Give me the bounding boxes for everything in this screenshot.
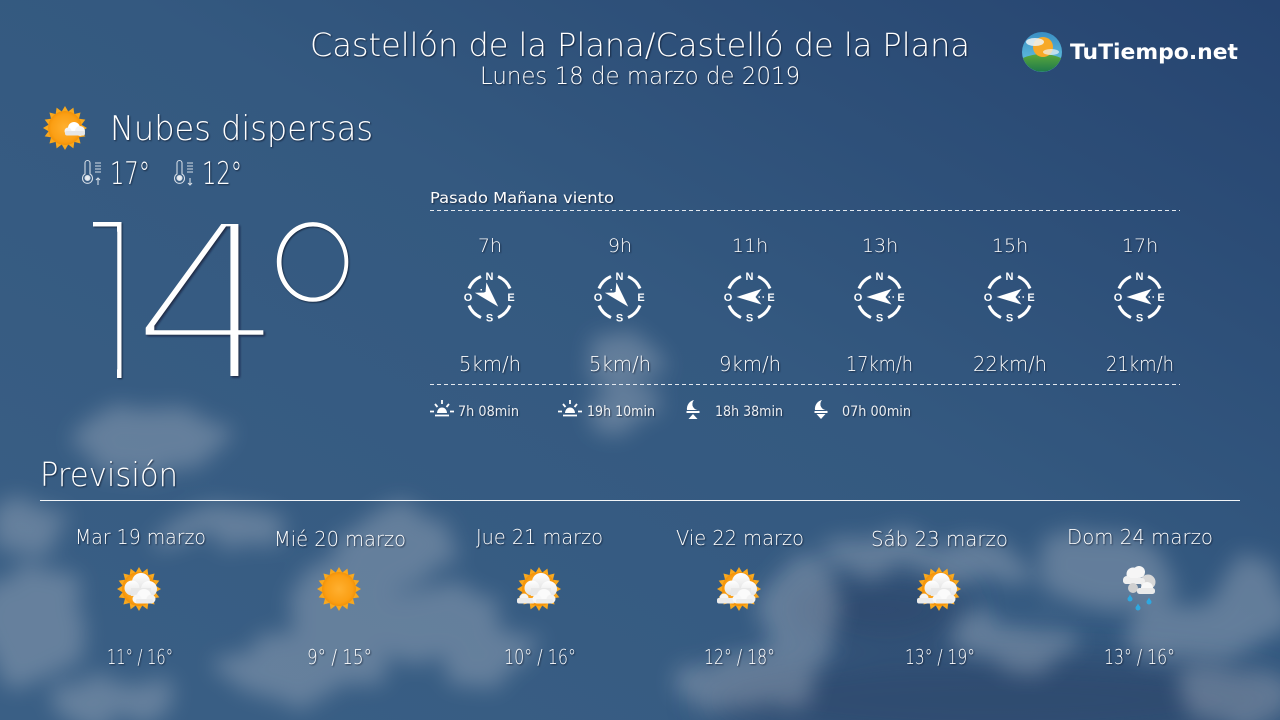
wind speeds: 21km/h [1106,352,1174,376]
forecast day 1: Mar 19 marzo [75,525,206,549]
icon: moonrise [686,400,700,419]
sunrise time: 7h 08min [458,404,519,420]
icon: logo globe [1022,32,1062,72]
logo wordmark: TuTiempo.net [1070,40,1238,64]
wind speeds: 5km/h [459,352,521,376]
forecast day 2: 9° / 15° [307,645,372,669]
icon: sunset [558,400,582,416]
icon: compass 9h: E [637,292,645,304]
current temperature: 4 [132,179,284,429]
forecast day 3: 10° / 16° [504,645,576,669]
wind hours: 7h [478,235,502,257]
icon: compass 17h: E [1157,292,1165,304]
wind hours: 9h [608,235,632,257]
forecast day 6: Dom 24 marzo [1067,525,1213,549]
min temperature: 12° [202,156,242,192]
wind speeds [459,352,1174,376]
title: Castellón de la Plana/Castelló de la Plana [310,26,970,64]
title [310,26,970,90]
moonset time: 07h 00min [842,404,911,420]
icon: compass 9h: N [616,271,624,283]
logo [1022,32,1238,72]
date subtitle: Lunes 18 de marzo de 2019 [480,62,800,90]
wind speeds: 9km/h [719,352,781,376]
forecast day 3 [476,525,603,669]
icon: compass 17h [1114,271,1165,325]
icon: compass 7h: E [507,292,515,304]
icon: thermometer min [174,160,193,185]
forecast day 2: Mié 20 marzo [274,527,406,551]
wind hours: 13h [862,235,898,257]
forecast day 1 [75,525,206,669]
icon: compass 11h: S [746,313,753,325]
icon: compass 15h: N [1006,271,1014,283]
icon: compass 7h: S [486,313,493,325]
icon: compass 11h: O [724,292,733,304]
current temperature: ° [246,160,379,507]
icon: compass 7h: N [486,271,494,283]
icon: compass 9h: S [616,313,623,325]
icon: compass 17h: S [1136,313,1143,325]
icon: compass 11h: E [767,292,775,304]
forecast day 6 [1067,525,1213,669]
icon: compass 13h: N [876,271,884,283]
icon: moonset [814,400,828,419]
moonrise time: 18h 38min [715,404,783,420]
sun and moon times [430,400,911,420]
current condition: Nubes dispersas [110,109,373,149]
wind speeds: 5km/h [589,352,651,376]
icon: compass 11h [724,271,775,325]
wind hours: 15h [992,235,1028,257]
forecast day 1: 11° / 16° [107,645,173,669]
current temperature: 1 [51,180,187,429]
forecast day 5: Sáb 23 marzo [871,527,1008,551]
wind hours: 17h [1122,235,1158,257]
icon: compass 15h [984,271,1035,325]
icon: compass 11h: N [746,271,754,283]
icon: current weather sun with cloud [40,103,90,153]
forecast day 6: 13° / 16° [1104,645,1175,669]
icon: compass 13h [854,271,905,325]
icon: compass 7h [464,271,515,325]
forecast panel [75,525,1213,669]
forecast day 4: Vie 22 marzo [676,526,804,550]
icon: compass 13h: E [897,292,905,304]
icon: compass 13h: O [854,292,863,304]
icon: thermometer max [82,160,101,185]
icon: compass 15h: E [1027,292,1035,304]
sunset time: 19h 10min [587,404,655,420]
current temperature [93,222,350,380]
wind hours [478,235,1158,257]
wind speeds: 22km/h [973,352,1047,376]
icon: compass 9h: O [594,292,603,304]
icon: compass 17h: N [1136,271,1144,283]
forecast day 2 [274,527,406,669]
icon: compass 15h: O [984,292,993,304]
forecast day 5: 13° / 19° [905,645,975,669]
wind speeds: 17km/h [846,352,913,376]
wind hours: 11h [732,235,768,257]
forecast day 5 [871,527,1008,669]
wind heading: Pasado Mañana viento [430,189,614,207]
icon: compass 15h: S [1006,313,1013,325]
forecast day 4: 12° / 18° [704,645,775,669]
icon: compass 9h [594,271,645,325]
max temperature: 17° [110,156,150,192]
forecast day 4 [676,526,804,669]
wind panel [430,189,1180,384]
icon: compass 13h: S [876,313,883,325]
icon: compass 7h: O [464,292,473,304]
icon: sunrise [430,400,454,416]
forecast heading: Previsión [40,455,178,494]
forecast day 3: Jue 21 marzo [476,525,603,549]
icon: compass 17h: O [1114,292,1123,304]
